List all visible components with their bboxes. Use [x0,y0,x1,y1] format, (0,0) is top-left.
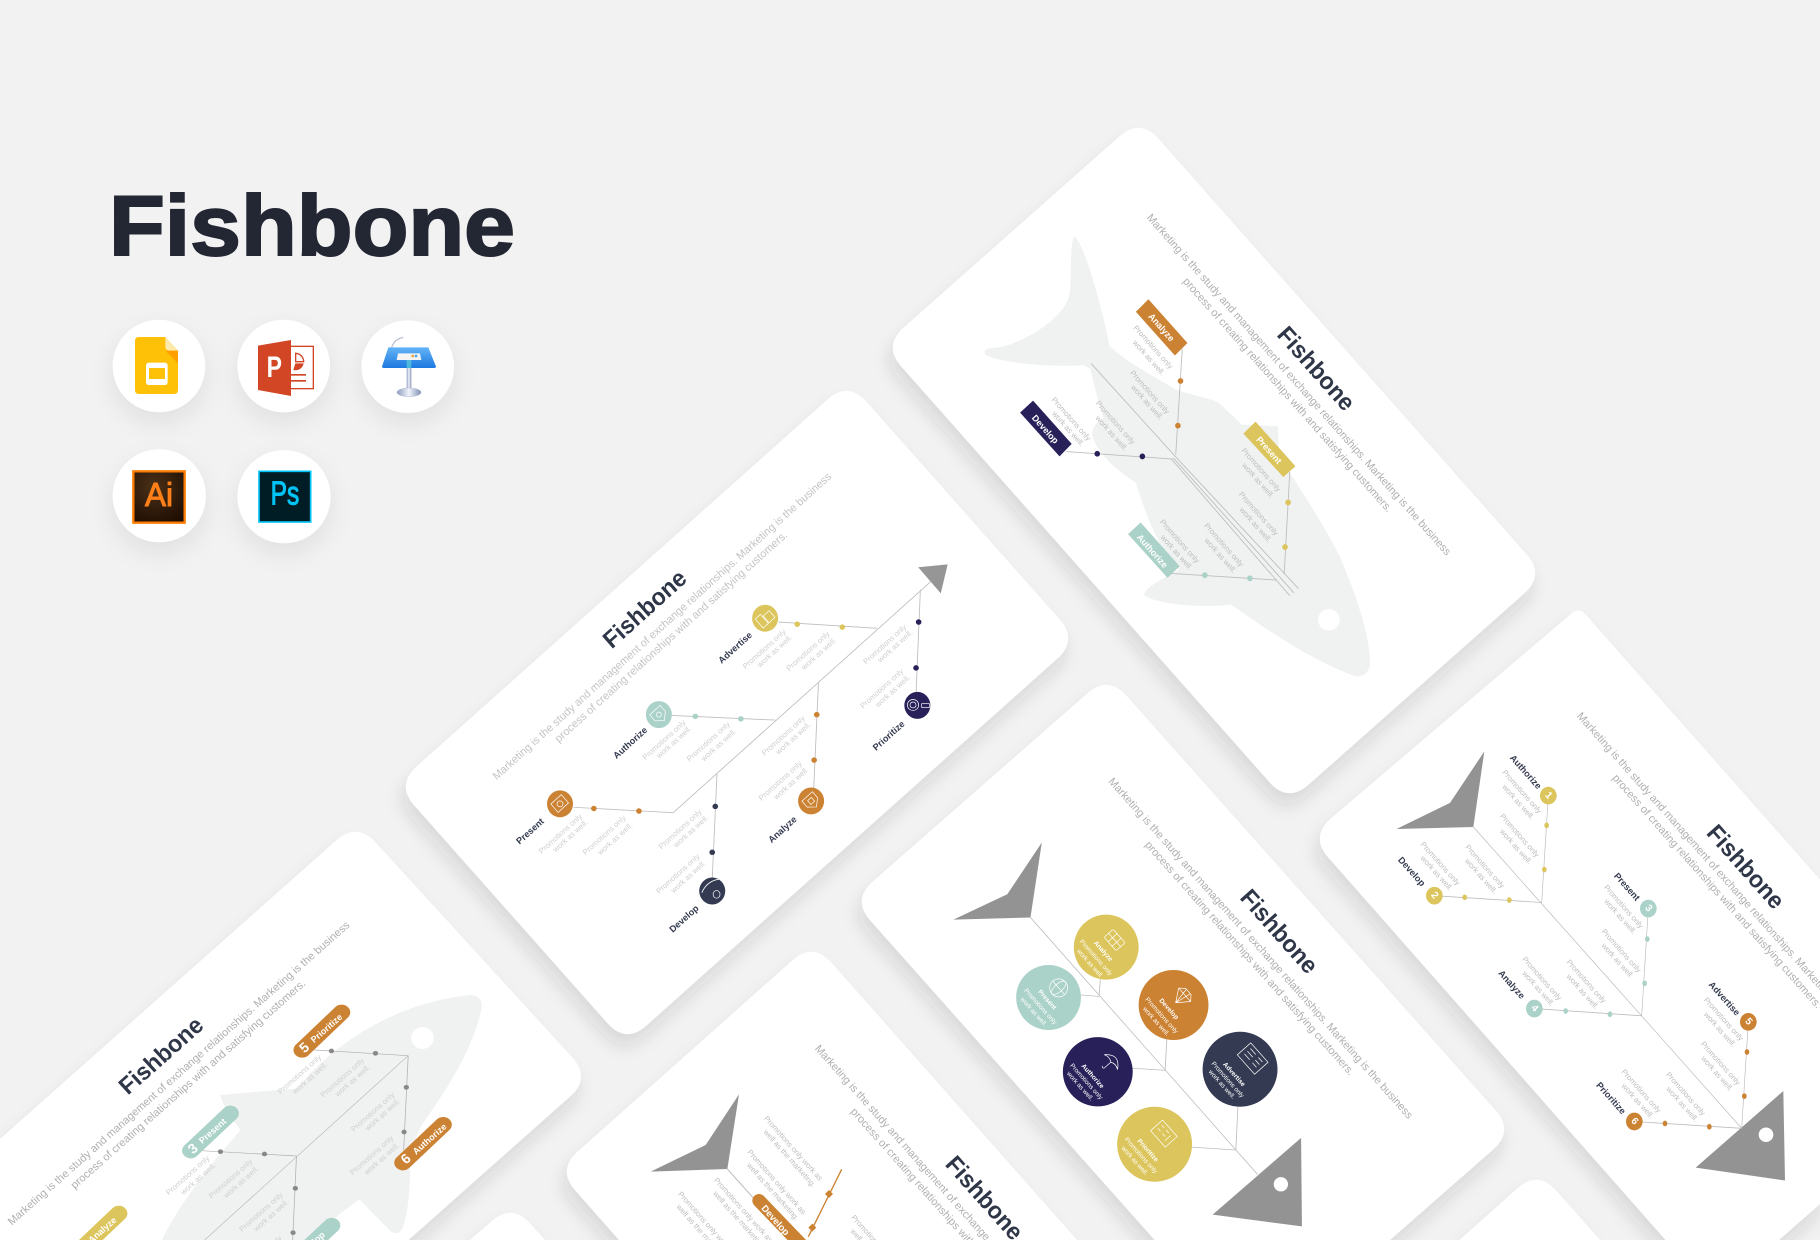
branch 2: Develop [1426,887,1542,905]
note text: work as well. [1418,853,1455,893]
icon badge: Illustrator: Ai [145,477,173,514]
card content [1396,710,1820,1181]
note text: Promotions only [1240,446,1283,494]
note text: Promotions only [319,1056,366,1099]
note text: work as well. [251,1197,291,1234]
card background [406,391,1068,1034]
branch: Analyze [1175,349,1183,455]
note text: Promotions only [1158,518,1201,565]
description: Marketing is the study and management of exchange relationships. Marketing is the business [6,919,353,1228]
branch: Prioritize [904,590,930,719]
card content [491,470,948,935]
tag: Authorize [397,1122,449,1167]
slide card 1: fish silhouette diagram [893,128,1535,793]
circle: Present [1016,965,1081,1030]
note text: work as well. [1497,826,1534,866]
circle: Present: work as well. [1018,995,1048,1028]
circle: Advertise [1203,1032,1278,1107]
label: Analyze: Analyze [1496,968,1527,1001]
note text: work as well. [1599,941,1636,980]
circle: Prioritize: work as well. [1119,1144,1149,1177]
note text: Promotions only [1498,812,1541,859]
note text: Promotions only [685,720,732,763]
note text: Promotions only [1237,490,1280,537]
tag: Present [1243,422,1295,477]
note text: work as well. [699,727,738,764]
note text: Promotions only work as [745,1148,808,1216]
circle: Authorize: work as well. [1064,1070,1095,1103]
spine [1091,364,1298,596]
label: Present: Present [1612,871,1642,903]
circle: Analyze: work as well. [1074,947,1105,980]
note text: work as well. [362,1141,401,1177]
note text: work as well. [1240,460,1276,500]
note text: Promotions only [348,1134,395,1177]
card background [0,832,581,1240]
card background [567,952,1077,1240]
tag: Develop [1020,401,1072,456]
orange branch [808,1169,842,1237]
tag: Develop: Develop [1030,413,1061,446]
branch: Develop [290,1156,298,1240]
tag: Analyze: Analyze [1146,311,1176,343]
branch: Advertise [752,605,877,632]
branch 4: Analyze [1526,1000,1642,1017]
label: Analyze: Analyze [766,814,799,845]
note text: work as well. [1462,856,1499,895]
spine [673,581,931,813]
note text: Promotions only [1094,399,1137,446]
branch 5: Advertise [1740,1013,1757,1128]
note text: Promotions only [785,629,832,673]
note text: work as well. [668,859,708,895]
fish silhouette [162,995,482,1240]
note text: work as well. [1128,382,1165,422]
circle: Advertise: Promotions only [1210,1061,1246,1100]
spine [727,1169,791,1240]
note text: Promotions only [1500,768,1544,815]
tag: Develop [752,1194,806,1240]
branch: Authorize [1171,572,1277,581]
note text: Promotions only [861,622,908,666]
branch: Present [201,1149,296,1156]
fish eye [411,1027,434,1049]
slide card 6: orange fishbone [567,952,1122,1240]
note text: Promotions only [1664,1070,1707,1117]
arrow head [918,564,948,593]
icon badge: Google Slides [113,320,205,412]
note text: work as well. [1500,782,1536,821]
tag: Prioritize [296,1012,344,1056]
circle: Analyze: Promotions only [1078,938,1114,978]
fish head [1213,1138,1302,1226]
note text: work as well. [1202,535,1238,575]
branch 1: Authorize [1540,787,1557,903]
note text: work as well. [1520,968,1556,1008]
description: process of creating relationships with and satisfying customers. [1142,839,1356,1078]
note text: Promotions only [276,1053,323,1096]
title: Fishbone [114,1012,209,1100]
note text: work as well. [1699,1053,1735,1093]
note text: Promotions only [537,812,584,856]
note text: Promotions only [1419,840,1462,887]
tag: Prioritize: Prioritize [309,1012,344,1045]
circle: Authorize: Authorize [1080,1063,1105,1090]
icon badge: PowerPoint: P [267,351,282,384]
branch: Analyze [798,682,824,814]
tag: Develop [294,1218,340,1240]
note text: work as well. [595,821,634,858]
title: Fishbone [1234,884,1323,979]
note text: Promotions only [1702,995,1745,1043]
circle: Present: Promotions only [1022,987,1058,1027]
branch: Develop [1066,451,1173,459]
note text: work as well. [1602,896,1638,936]
branch: Authorize [401,1056,409,1150]
description: process of creating relationships with and satisfying customers. [553,529,790,745]
note text: work as well. [799,635,838,672]
card content [6,919,482,1240]
note text: Promotions only [1128,369,1171,416]
tag: Develop: Develop [759,1203,791,1238]
circle: Advertise: work as well. [1206,1068,1236,1101]
card content [651,1043,1122,1240]
note text: work as well. [654,724,693,761]
circle: Analyze [1074,915,1139,980]
label: Develop: Develop [667,903,701,935]
fish tail [953,842,1042,920]
note text: work as well. [1664,1084,1700,1124]
slide card 2: arrow fishbone with icon circles [406,391,1068,1034]
app icons group [113,320,454,543]
icon badge: Keynote [361,320,454,413]
note text: Promotions only [1202,521,1246,569]
branch: Prioritize [314,1049,408,1056]
circle: Develop: work as well. [1140,1005,1171,1038]
tag: Authorize: 6 [397,1150,414,1167]
label: Present: Present [514,816,546,846]
title: Fishbone [1272,321,1360,416]
tag: Authorize: Authorize [1135,532,1170,570]
note text: Promotions only [1463,843,1507,890]
branch: Present [1282,472,1291,574]
circle: Prioritize: Promotions only [1123,1136,1159,1176]
note text: work as well. [755,633,794,670]
circle: Advertise: Advertise [1221,1061,1247,1088]
note text: work as well. [873,673,912,710]
slide card 7 (corner only) [470,1213,545,1240]
label: Authorize: Authorize [611,725,649,761]
slide card 5: rocket-shaped fish with pill tags [0,832,581,1240]
spine [205,1056,408,1240]
fish tail [1397,751,1484,829]
title: Fishbone [1701,820,1790,915]
tag: Prioritize: 5 [296,1039,312,1056]
note text: Promotions only [1620,1067,1663,1115]
tag: Analyze [1136,299,1187,356]
note text: Promotions only [1050,395,1093,443]
note text: Promotions only [1699,1040,1742,1087]
fish eye [1318,609,1340,631]
note text: Promotions only [349,1090,397,1134]
label: Prioritize: Prioritize [1594,1080,1628,1116]
note text: work as well. [1564,972,1601,1011]
branch 1: Authorize: 1 [1542,790,1555,802]
card background [893,128,1535,793]
note text: work as well. [178,1161,218,1197]
icon badge: Photoshop: Ps [271,475,299,512]
circle: Develop: Develop [1157,997,1180,1021]
icon badge: Illustrator [113,449,206,542]
note text: work as well. [1619,1081,1656,1120]
heading: Fishbone: Fishbone [109,179,515,274]
label: Prioritize: Prioritize [871,719,907,753]
branch: Develop [699,774,725,904]
branch 3: Present [1640,900,1657,1016]
description: Marketing is the study and management of exchange relationships. Marketing is the business [491,470,834,783]
fish tail [651,1094,739,1172]
icon badge: PowerPoint [237,320,330,412]
tag: Authorize: Authorize [411,1122,449,1156]
description: process of creating relationships with and satisfying customers. [1180,276,1394,515]
card background [862,685,1504,1240]
note text: work as well. [1050,409,1086,448]
branch: Present [547,790,673,817]
fish silhouette [985,236,1370,676]
tag: Analyze [79,1206,127,1240]
slide card 8 (corner only) [1460,1180,1600,1240]
note text: work as well. [875,628,915,665]
tag: Present: Present [1254,435,1284,466]
note text: Promotions only work as [762,1114,825,1183]
branch 5: Advertise: 5 [1742,1016,1755,1028]
note text: Promotions only [655,852,701,896]
note text: work as well. [332,1063,372,1099]
branch: Authorize [646,701,775,728]
note text: work as well. [771,765,810,802]
note text: work as well. [773,720,813,757]
circle: Develop [1139,970,1208,1040]
spine [1473,827,1742,1128]
note text: Promotions only [1600,927,1643,974]
circle: Prioritize: Prioritize [1135,1138,1160,1164]
branch 2: Develop: 2 [1428,890,1441,902]
note text: work as well. [1093,413,1130,453]
note text: work as well. [1158,532,1195,572]
branch 4: Analyze: 4 [1528,1003,1541,1015]
branch 3: Present: 3 [1642,903,1655,915]
description: process of creating relationships with and satisfying customers. [69,978,308,1192]
circle: Present: Present [1036,989,1058,1012]
label: Develop: Develop [1396,855,1428,889]
note text: Promotions only [657,807,704,851]
description: process of creating relationships with and satisfying customers. [1610,772,1820,1011]
tag: Authorize [1128,523,1180,578]
note text: work as well. [290,1060,330,1097]
icon badge: Photoshop [237,450,331,543]
note text: work as well. [1237,505,1274,544]
circle: Develop: Promotions only [1144,996,1180,1036]
note text: work as well. [550,818,590,855]
card background [1320,610,1820,1240]
label: Authorize: Authorize [1508,753,1543,791]
description: Marketing is the study and management of exchange relationships. Marketing is the business [1144,212,1453,558]
circle: Analyze: Analyze [1092,940,1114,963]
circle: Authorize [1063,1037,1133,1106]
slide card 3: large coloured circles [862,685,1504,1240]
note text: Promotions only [757,759,804,803]
note text: Promotions only [1520,955,1564,1002]
note text: Promotions only [1132,323,1175,371]
fish head [1696,1091,1785,1181]
note text: work as well. [1130,338,1167,377]
title: Fishbone [598,565,692,654]
branch 6: Prioritize: 6 [1628,1116,1641,1128]
description: Marketing is the study and management of exchange relationships. Marketing is the business [1106,776,1415,1122]
card content [985,212,1453,676]
note text: work as well. [671,813,710,850]
spine and connectors [1030,917,1258,1175]
note text: Promotions only [1565,958,1608,1005]
note text: Promotions only [581,813,628,857]
label: Advertise: Advertise [716,630,754,666]
note text: Promotions only [641,718,688,762]
note text: well as the marketing. [744,1160,801,1222]
note text: Promotions only [237,1190,285,1234]
note text: work as well. [362,1097,402,1133]
branch 6: Prioritize [1626,1113,1742,1130]
note text: Promotions only [207,1157,254,1200]
note text: well as the marketing. [761,1127,818,1189]
note text: Promotions only [858,667,905,710]
note text: work as well. [221,1164,261,1201]
tag: Present: 3 [184,1140,201,1157]
circle: Prioritize [1117,1107,1192,1182]
tag: Present [184,1113,230,1157]
note text: Promotions only [760,714,807,758]
note text: Promotions only [741,627,788,671]
note text: Promotions only [164,1154,212,1197]
circle: Authorize: Promotions only [1068,1062,1104,1102]
label: Advertise: Advertise [1707,980,1742,1017]
card content [953,776,1415,1226]
note text: Promotions only [1602,883,1645,930]
tag: Present: Present [197,1116,228,1146]
note text: work as well. [1701,1009,1738,1049]
slide card 4: numbered fishbone [1320,610,1820,1240]
